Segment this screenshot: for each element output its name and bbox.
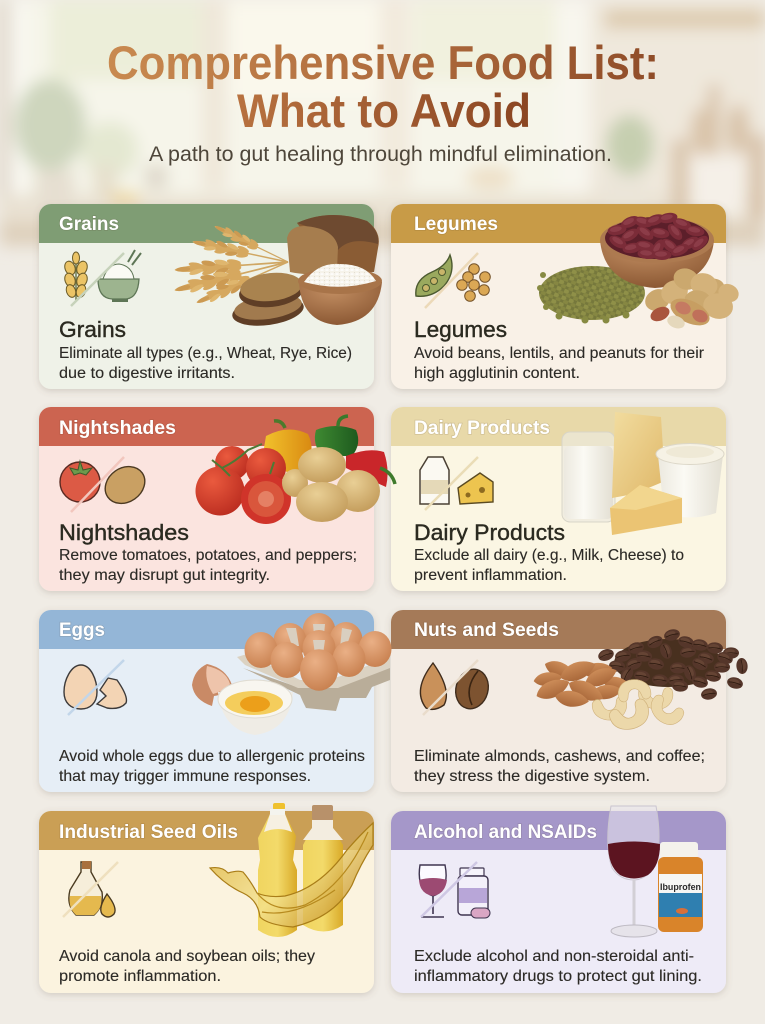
bowl with yolk bbox=[218, 680, 293, 735]
coffee beans bbox=[597, 628, 748, 701]
description: Avoid beans, lentils, and peanuts for their bbox=[414, 345, 705, 362]
egg carton with eggs bbox=[237, 613, 392, 711]
description: prevent inflammation. bbox=[414, 567, 567, 584]
icon: milk carton and cheese crossed out bbox=[420, 457, 493, 510]
icon: wheat and rice bowl crossed out bbox=[63, 250, 141, 306]
potatoes bbox=[282, 447, 380, 522]
panel: industrial seed oils bbox=[39, 803, 374, 993]
description: Exclude alcohol and non-steroidal anti- bbox=[414, 948, 694, 965]
icon: egg and broken shell crossed out bbox=[64, 660, 127, 715]
description: high agglutinin content. bbox=[414, 365, 580, 382]
description: Avoid whole eggs due to allergenic proteins bbox=[59, 748, 365, 765]
card heading: Dairy Products bbox=[414, 520, 565, 545]
icon: pea pod and lentils crossed out bbox=[416, 253, 490, 308]
description bbox=[59, 948, 315, 985]
description bbox=[414, 748, 705, 785]
header label: Eggs bbox=[59, 620, 105, 641]
wedge of cheese bbox=[612, 412, 665, 498]
description: they stress the digestive system. bbox=[414, 768, 650, 785]
description: inflammatory drugs to protect gut lining. bbox=[414, 968, 702, 985]
panel: grains bbox=[39, 204, 382, 389]
panel: nightshades bbox=[39, 407, 395, 591]
oil bottles bbox=[258, 803, 343, 937]
yogurt cup bbox=[656, 444, 724, 518]
cashews bbox=[591, 677, 686, 736]
panel: nuts and seeds bbox=[391, 610, 748, 792]
glass of milk bbox=[562, 432, 615, 522]
icon: wine glass and pill bottle crossed out bbox=[419, 862, 490, 918]
description bbox=[59, 345, 352, 382]
panel: eggs bbox=[39, 610, 392, 792]
description bbox=[414, 345, 705, 382]
description: due to digestive irritants. bbox=[59, 365, 235, 382]
description: Eliminate almonds, cashews, and coffee; bbox=[414, 748, 705, 765]
header label: Nightshades bbox=[59, 418, 176, 439]
card heading: Nightshades bbox=[59, 520, 189, 545]
header label: Alcohol and NSAIDs bbox=[414, 822, 597, 843]
description bbox=[59, 748, 365, 785]
tomatoes bbox=[196, 444, 291, 524]
rice bowl bbox=[298, 264, 382, 325]
wine glass bbox=[608, 806, 660, 937]
wheat stalks bbox=[173, 221, 291, 309]
panel: legumes bbox=[391, 204, 742, 389]
description: promote inflammation. bbox=[59, 968, 221, 985]
title: Comprehensive Food List: bbox=[107, 36, 659, 89]
cheese block bbox=[610, 485, 682, 535]
description: Avoid canola and soybean oils; they bbox=[59, 948, 315, 965]
bread loaf and slices bbox=[230, 215, 379, 330]
header label: Nuts and Seeds bbox=[414, 620, 559, 641]
header label: Legumes bbox=[414, 214, 498, 235]
icon: oil jug and drop crossed out bbox=[63, 861, 118, 917]
title: What to Avoid bbox=[237, 84, 531, 137]
title bbox=[107, 36, 659, 137]
description bbox=[414, 948, 702, 985]
ibuprofen bottle bbox=[658, 842, 703, 932]
oil splash bbox=[210, 823, 373, 927]
panel: dairy products bbox=[391, 407, 726, 591]
header label: Industrial Seed Oils bbox=[59, 822, 238, 843]
almonds bbox=[533, 656, 633, 710]
description: Exclude all dairy (e.g., Milk, Cheese) to bbox=[414, 547, 684, 564]
description: that may trigger immune responses. bbox=[59, 768, 311, 785]
icon: almond and coffee bean crossed out bbox=[420, 660, 493, 715]
card heading: Legumes bbox=[414, 317, 507, 342]
description bbox=[414, 547, 684, 584]
ibuprofen bottle: Ibuprofen bbox=[660, 882, 701, 893]
header label: Dairy Products bbox=[414, 418, 550, 439]
description bbox=[59, 547, 357, 584]
panel: alcohol and nsaids bbox=[391, 806, 726, 993]
peppers bbox=[264, 416, 395, 487]
card heading: Grains bbox=[59, 317, 126, 342]
peanuts bbox=[641, 264, 742, 331]
bean bowl bbox=[600, 211, 714, 288]
lentil pile bbox=[537, 266, 645, 324]
description: Remove tomatoes, potatoes, and peppers; bbox=[59, 547, 357, 564]
egg shell bbox=[192, 664, 232, 706]
header label: Grains bbox=[59, 214, 119, 235]
subtitle: A path to gut healing through mindful elimination. bbox=[149, 142, 612, 166]
description: Eliminate all types (e.g., Wheat, Rye, Rice) bbox=[59, 345, 352, 362]
icon: tomato and potato crossed out bbox=[60, 457, 152, 512]
description: they may disrupt gut integrity. bbox=[59, 567, 270, 584]
